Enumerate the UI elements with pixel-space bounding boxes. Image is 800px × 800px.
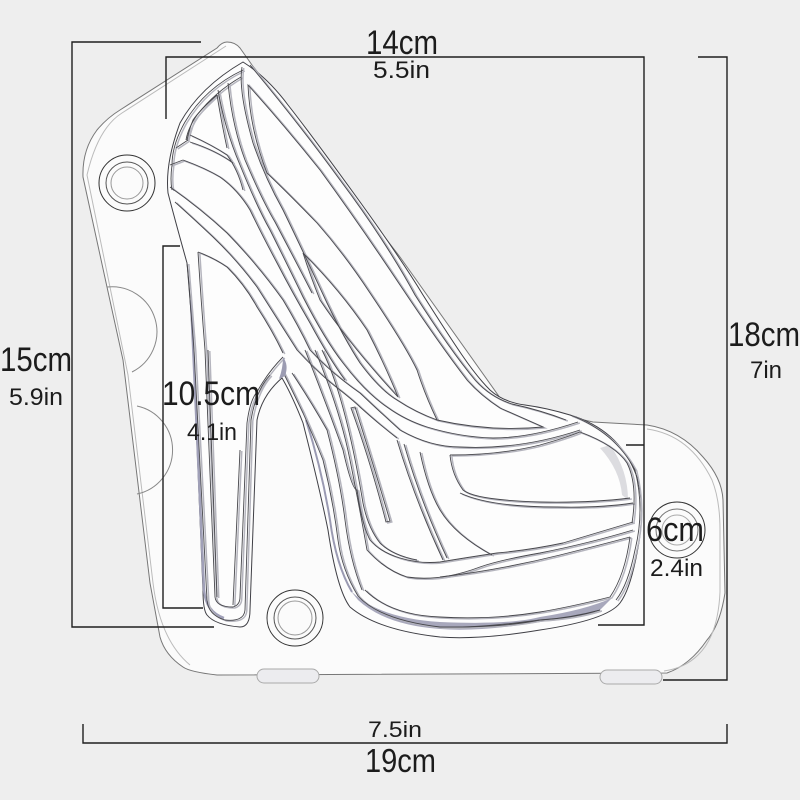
dimension lines: [72, 42, 727, 743]
mold plate: [83, 42, 725, 675]
label: height 15cm: 15cm: [0, 341, 72, 379]
label: width 14cm: 14cm: [366, 24, 438, 62]
label: width 14cm: [366, 24, 438, 84]
label: height 15cm: [0, 341, 72, 411]
label: length 19cm: 7.5in: [368, 717, 422, 742]
heel apex highlight: [279, 357, 287, 379]
plate notch arcs: [107, 287, 173, 494]
label: heel 10.5cm: 4.1in: [187, 419, 237, 446]
mold circle right: [649, 502, 705, 558]
shoe body: [168, 62, 642, 638]
label: toe 6cm: 6cm: [646, 511, 704, 549]
sole shading: [350, 590, 612, 630]
label: height 15cm: 5.9in: [9, 384, 63, 411]
mold circle left: [99, 155, 155, 211]
toe shading: [600, 445, 628, 500]
label: length 19cm: 19cm: [365, 742, 436, 779]
label: toe 6cm: 2.4in: [650, 555, 703, 582]
arch shading: [306, 420, 352, 592]
label: heel 10.5cm: 10.5cm: [162, 375, 260, 413]
foot pad right: [600, 670, 662, 684]
label: toe 6cm: [646, 511, 704, 582]
label: length 19cm: [365, 717, 436, 779]
label: height 18cm: [728, 316, 800, 384]
foot pad left: [257, 669, 319, 683]
mold circle bottom: [267, 590, 323, 646]
label: heel 10.5cm: [162, 375, 260, 446]
label: width 14cm: 5.5in: [373, 57, 430, 84]
label: height 18cm: 7in: [750, 357, 782, 384]
heel shading: [191, 300, 224, 618]
